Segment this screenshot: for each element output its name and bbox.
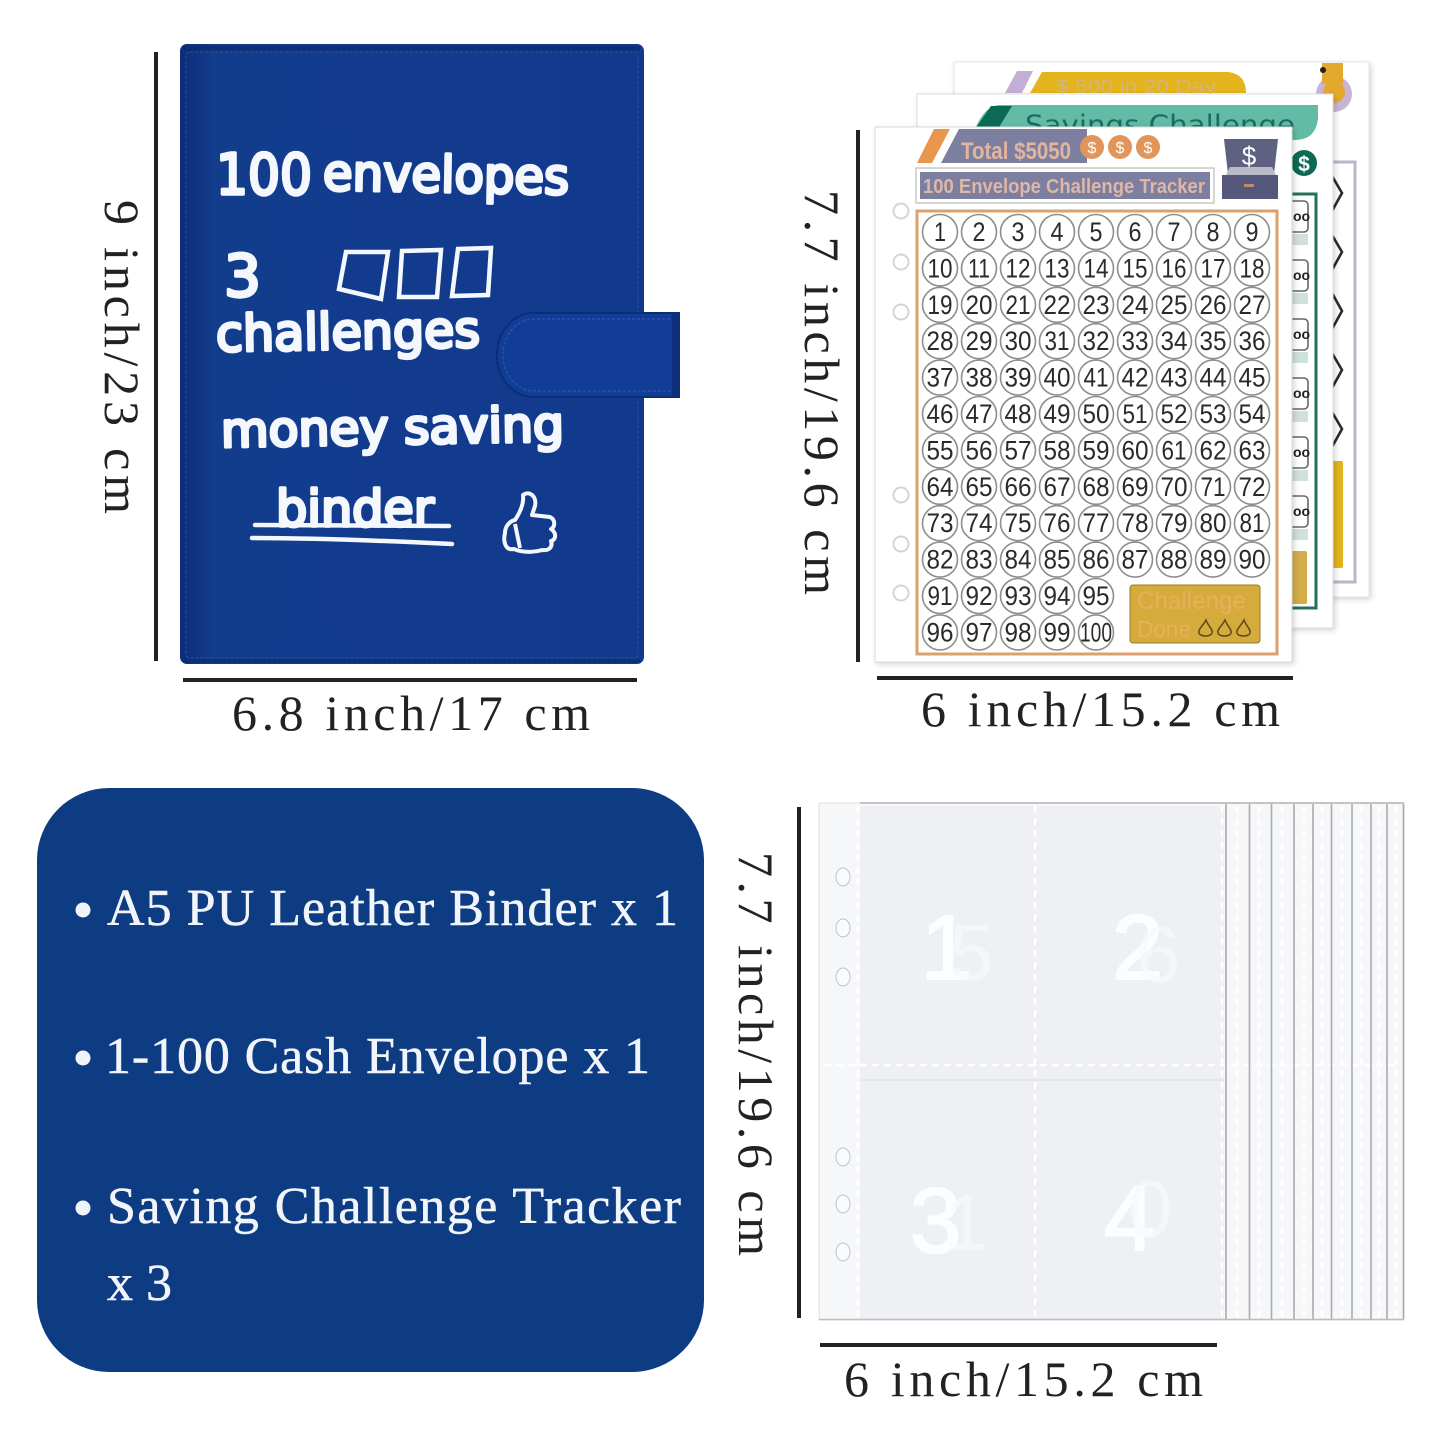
number grid 1-100: 36 bbox=[1238, 326, 1266, 356]
number grid 1-100: 93 bbox=[1004, 581, 1032, 611]
number grid 1-100: 14 bbox=[1084, 253, 1108, 283]
number grid 1-100: 77 bbox=[1082, 508, 1110, 538]
number grid 1-100: 15 bbox=[1122, 253, 1148, 283]
number grid 1-100: 100 bbox=[1080, 617, 1112, 647]
cover icon: thumbs up bbox=[504, 493, 555, 552]
number grid 1-100: 98 bbox=[1004, 617, 1032, 647]
number grid 1-100: 38 bbox=[966, 363, 992, 393]
middle sheet: savings challenge: oo bbox=[1293, 326, 1310, 342]
number grid 1-100: 30 bbox=[1004, 326, 1032, 356]
pocket numbers: 6 bbox=[1136, 910, 1180, 999]
number grid 1-100: 53 bbox=[1200, 399, 1226, 429]
number grid 1-100: 11 bbox=[968, 253, 990, 283]
cover text: money saving: money saving bbox=[221, 397, 564, 459]
pocket numbers: 3 bbox=[910, 1170, 961, 1272]
number grid 1-100: 78 bbox=[1122, 508, 1148, 538]
number grid 1-100: 64 bbox=[926, 472, 954, 502]
number grid 1-100: 28 bbox=[926, 326, 954, 356]
number grid 1-100: 29 bbox=[966, 326, 992, 356]
back sheet: $500 in 20 day: $ 500 in 20 Day bbox=[1056, 77, 1217, 98]
pocket height line bbox=[797, 807, 801, 1318]
number grid 1-100: 59 bbox=[1082, 435, 1110, 465]
number grid 1-100: 2 bbox=[972, 217, 986, 247]
number grid frame bbox=[917, 211, 1277, 654]
number grid 1-100: 34 bbox=[1160, 326, 1188, 356]
binder width line bbox=[183, 678, 637, 682]
tracker title bbox=[916, 168, 1214, 203]
number grid 1-100: 23 bbox=[1082, 290, 1110, 320]
number grid 1-100: 22 bbox=[1044, 290, 1070, 320]
number grid 1-100: 7 bbox=[1168, 217, 1180, 247]
number grid 1-100: 24 bbox=[1122, 290, 1148, 320]
pocket height label: 7.7 inch/19.6 cm bbox=[728, 852, 784, 1256]
tracker height line bbox=[856, 130, 860, 662]
middle sheet: savings challenge bbox=[917, 94, 1333, 628]
number grid 1-100: 80 bbox=[1200, 508, 1226, 538]
number grid 1-100: 56 bbox=[966, 435, 992, 465]
number grid 1-100: 99 bbox=[1044, 617, 1070, 647]
cover text: 3 challenges: challenges bbox=[215, 301, 480, 363]
number grid 1-100: 85 bbox=[1044, 545, 1070, 575]
number grid 1-100: 18 bbox=[1240, 253, 1264, 283]
number grid 1-100: 26 bbox=[1200, 290, 1226, 320]
number grid 1-100: 72 bbox=[1238, 472, 1266, 502]
number grid 1-100: 83 bbox=[966, 545, 992, 575]
middle sheet: savings challenge: oo bbox=[1293, 444, 1310, 460]
number grid 1-100: 6 bbox=[1128, 217, 1142, 247]
number grid 1-100: 16 bbox=[1162, 253, 1186, 283]
number grid 1-100: 40 bbox=[1044, 363, 1070, 393]
number grid 1-100: 60 bbox=[1122, 435, 1148, 465]
number grid 1-100: 62 bbox=[1200, 435, 1226, 465]
number grid 1-100: 27 bbox=[1238, 290, 1266, 320]
number grid 1-100: 57 bbox=[1004, 435, 1032, 465]
binder holes bbox=[894, 204, 908, 600]
number grid 1-100: 31 bbox=[1044, 326, 1070, 356]
panel: binder with dimensions bbox=[94, 44, 679, 741]
pocket holes bbox=[836, 868, 850, 1261]
challenge done badge: Done bbox=[1137, 616, 1191, 642]
number grid 1-100: 94 bbox=[1044, 581, 1070, 611]
number grid 1-100: 88 bbox=[1160, 545, 1188, 575]
number grid 1-100: 41 bbox=[1084, 363, 1108, 393]
tracker header: Total $5050: Total $5050 bbox=[961, 138, 1071, 165]
tracker width line bbox=[877, 676, 1293, 680]
binder strap bbox=[497, 313, 679, 397]
number grid 1-100: 10 bbox=[928, 253, 952, 283]
pocket numbers bbox=[910, 897, 1180, 1272]
tracker height label: 7.7 inch/19.6 cm bbox=[794, 190, 850, 595]
pocket numbers: 2 bbox=[1112, 897, 1163, 999]
list item: envelope: 1-100 Cash Envelope x 1 bbox=[105, 1028, 650, 1085]
middle sheet: savings challenge: oo bbox=[1293, 208, 1310, 224]
number grid 1-100: 84 bbox=[1004, 545, 1032, 575]
cover text: 3 challenges: 3 bbox=[224, 242, 261, 310]
middle sheet: savings challenge: oo bbox=[1293, 267, 1310, 283]
pocket numbers: 1 bbox=[944, 1178, 988, 1267]
number grid 1-100: 5 bbox=[1090, 217, 1102, 247]
number grid 1-100: 33 bbox=[1122, 326, 1148, 356]
number grid 1-100: 63 bbox=[1238, 435, 1266, 465]
list item: binder: A5 PU Leather Binder x 1 bbox=[107, 880, 678, 937]
number grid 1-100: 67 bbox=[1044, 472, 1070, 502]
panel: clear pockets with dimensions bbox=[728, 803, 1404, 1407]
middle sheet: savings challenge: Savings Challenge bbox=[1025, 110, 1295, 141]
number grid 1-100: 32 bbox=[1082, 326, 1110, 356]
number grid 1-100: 66 bbox=[1004, 472, 1032, 502]
number grid 1-100: 8 bbox=[1206, 217, 1220, 247]
number grid 1-100 bbox=[922, 214, 1270, 650]
number grid 1-100: 82 bbox=[926, 545, 954, 575]
number grid 1-100: 44 bbox=[1200, 363, 1226, 393]
number grid 1-100: 91 bbox=[928, 581, 952, 611]
number grid 1-100: 45 bbox=[1238, 363, 1266, 393]
number grid 1-100: 46 bbox=[926, 399, 954, 429]
number grid 1-100: 79 bbox=[1160, 508, 1188, 538]
icon: treasure chest bbox=[1222, 139, 1278, 199]
contents background bbox=[37, 788, 704, 1372]
number grid 1-100: 51 bbox=[1122, 399, 1148, 429]
number grid 1-100: 52 bbox=[1160, 399, 1188, 429]
number grid 1-100: 17 bbox=[1200, 253, 1226, 283]
tracker title: 100 Envelope Challenge Tracker bbox=[923, 176, 1205, 198]
pocket numbers: 0 bbox=[1128, 1164, 1172, 1253]
cover text: 100 envelopes: 100 bbox=[216, 143, 312, 208]
number grid 1-100: 9 bbox=[1246, 217, 1258, 247]
number grid 1-100: 74 bbox=[966, 508, 992, 538]
number grid 1-100: 3 bbox=[1012, 217, 1024, 247]
number grid 1-100: 13 bbox=[1044, 253, 1070, 283]
front sheet: 100 envelope challenge tracker bbox=[875, 127, 1292, 662]
number grid 1-100: 70 bbox=[1160, 472, 1188, 502]
challenge done badge: Challenge bbox=[1137, 587, 1246, 615]
number grid 1-100: 42 bbox=[1122, 363, 1148, 393]
number grid 1-100: 47 bbox=[966, 399, 992, 429]
number grid 1-100: 55 bbox=[926, 435, 954, 465]
number grid 1-100: 49 bbox=[1044, 399, 1070, 429]
binder width label: 6.8 inch/17 cm bbox=[232, 685, 590, 741]
number grid 1-100: 37 bbox=[926, 363, 954, 393]
tracker header: Total $5050: $ bbox=[1116, 140, 1125, 157]
number grid 1-100: 25 bbox=[1160, 290, 1188, 320]
number grid 1-100: 20 bbox=[966, 290, 992, 320]
number grid 1-100: 73 bbox=[926, 508, 954, 538]
number grid 1-100: 21 bbox=[1006, 290, 1030, 320]
binder cover bbox=[180, 44, 644, 664]
number grid 1-100: 81 bbox=[1240, 508, 1264, 538]
number grid 1-100: 65 bbox=[966, 472, 992, 502]
number grid 1-100: 96 bbox=[926, 617, 954, 647]
middle sheet: savings challenge: oo bbox=[1293, 503, 1310, 519]
number grid 1-100: 35 bbox=[1200, 326, 1226, 356]
tracker header: Total $5050 bbox=[917, 129, 1160, 165]
number grid 1-100: 39 bbox=[1004, 363, 1032, 393]
binder height line bbox=[154, 52, 158, 661]
pocket width line bbox=[820, 1343, 1217, 1347]
number grid 1-100: 71 bbox=[1200, 472, 1226, 502]
tracker width label: 6 inch/15.2 cm bbox=[921, 681, 1280, 737]
number grid 1-100: 50 bbox=[1082, 399, 1110, 429]
pocket width label: 6 inch/15.2 cm bbox=[844, 1351, 1203, 1407]
number grid 1-100: 48 bbox=[1004, 399, 1032, 429]
number grid 1-100: 19 bbox=[928, 290, 952, 320]
number grid 1-100: 95 bbox=[1082, 581, 1110, 611]
pocket numbers: 5 bbox=[949, 908, 994, 997]
list item: tracker: x 3 bbox=[107, 1255, 172, 1312]
tracker header: Total $5050: $ bbox=[1088, 140, 1097, 157]
number grid 1-100: 90 bbox=[1238, 545, 1266, 575]
number grid 1-100: 54 bbox=[1238, 399, 1266, 429]
number grid 1-100: 92 bbox=[966, 581, 992, 611]
panel: package contents list bbox=[37, 788, 704, 1372]
icon: treasure chest: $ bbox=[1242, 141, 1257, 171]
number grid 1-100: 12 bbox=[1006, 253, 1030, 283]
panel: tracker sheets with dimensions bbox=[794, 62, 1369, 737]
number grid 1-100: 61 bbox=[1162, 435, 1186, 465]
number grid 1-100: 97 bbox=[966, 617, 992, 647]
challenge done badge bbox=[1130, 585, 1260, 643]
list item: tracker: Saving Challenge Tracker bbox=[107, 1178, 681, 1235]
number grid 1-100: 1 bbox=[934, 217, 946, 247]
cover text: 100 envelopes: envelopes bbox=[323, 144, 570, 206]
number grid 1-100: 69 bbox=[1122, 472, 1148, 502]
cover text: 100 envelopes bbox=[216, 143, 570, 208]
pocket numbers: 4 bbox=[1104, 1168, 1155, 1270]
number grid 1-100: 75 bbox=[1004, 508, 1032, 538]
middle sheet: savings challenge: $ bbox=[1298, 153, 1310, 176]
number grid 1-100: 4 bbox=[1050, 217, 1064, 247]
cover icon: three squares bbox=[339, 248, 491, 299]
tracker header: Total $5050: $ bbox=[1144, 140, 1153, 157]
number grid 1-100: 89 bbox=[1200, 545, 1226, 575]
middle sheet: savings challenge: oo bbox=[1293, 385, 1310, 401]
list item: tracker bbox=[76, 1178, 681, 1312]
clear pocket sheets bbox=[819, 803, 1404, 1320]
number grid 1-100: 43 bbox=[1160, 363, 1188, 393]
number grid 1-100: 68 bbox=[1082, 472, 1110, 502]
binder height label: 9 inch/23 cm bbox=[94, 200, 150, 514]
number grid 1-100: 87 bbox=[1122, 545, 1148, 575]
pocket numbers: 1 bbox=[921, 897, 972, 999]
number grid 1-100: 76 bbox=[1044, 508, 1070, 538]
number grid 1-100: 86 bbox=[1082, 545, 1110, 575]
back sheet: $500 in 20 day bbox=[954, 62, 1369, 597]
cover text: binder: binder bbox=[276, 480, 434, 538]
number grid 1-100: 58 bbox=[1044, 435, 1070, 465]
cover text: 3 challenges bbox=[215, 242, 480, 363]
